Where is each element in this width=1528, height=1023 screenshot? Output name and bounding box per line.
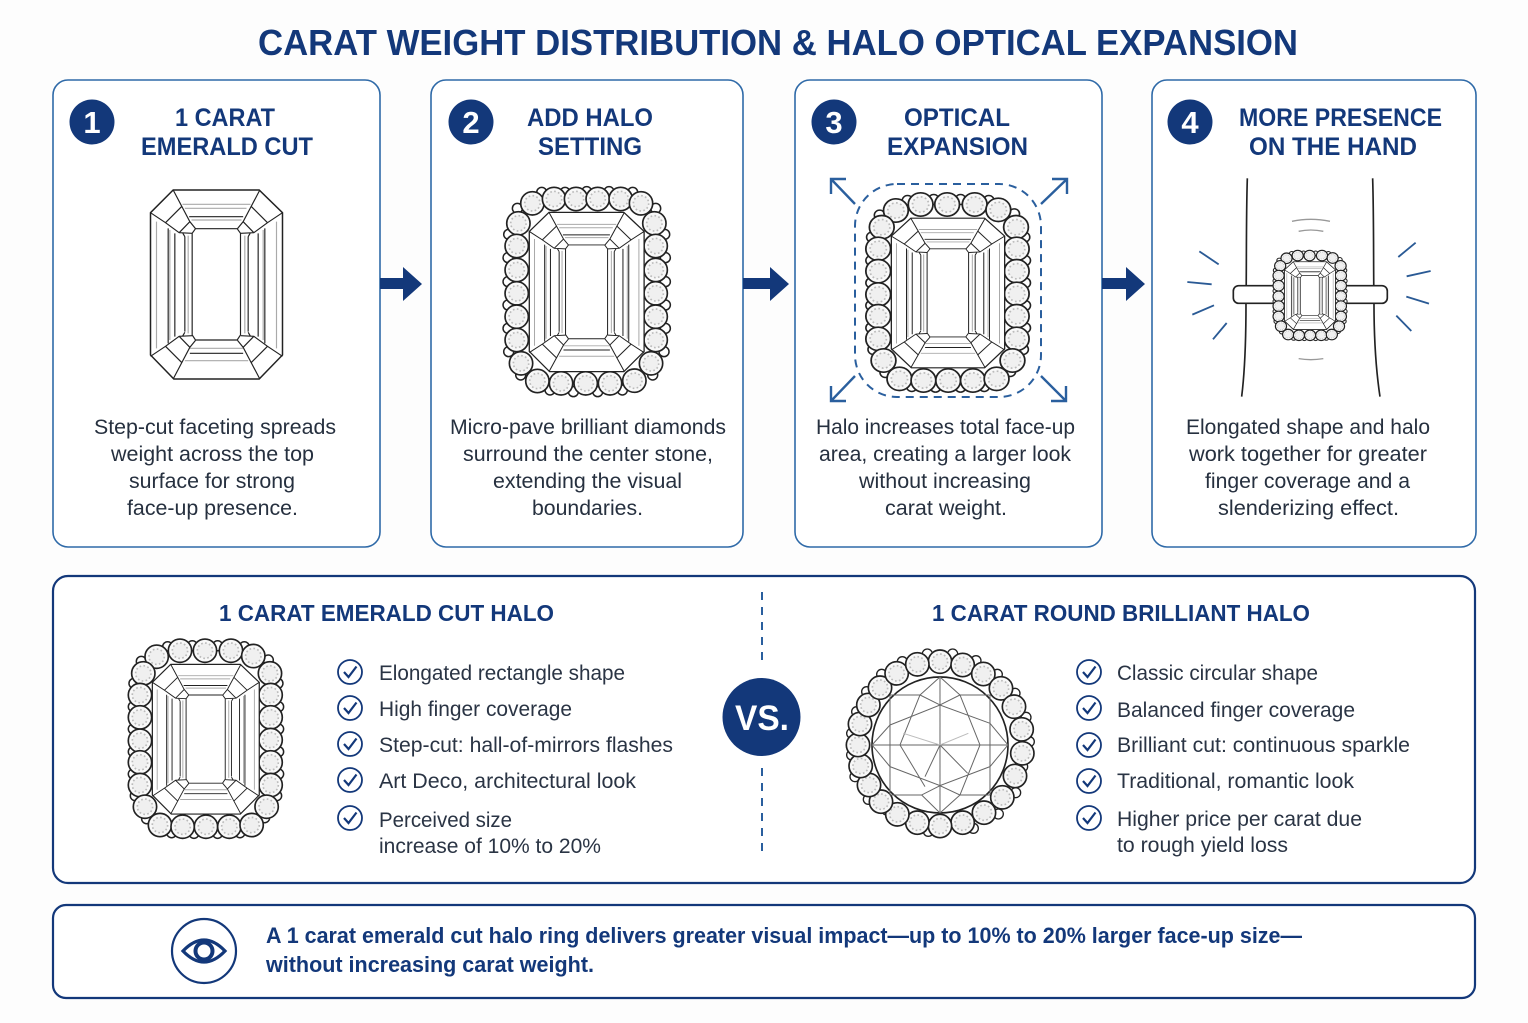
list: round brilliant features: Balanced finger coverage <box>1117 699 1355 722</box>
heading: 1 carat emerald cut: 1 CARAT <box>175 104 275 132</box>
arrow: step 3 to 4 <box>1102 267 1145 301</box>
arrow: step 1 to 2 <box>380 267 422 301</box>
heading: more presence on the hand: ON THE HAND <box>1249 133 1417 161</box>
list: round brilliant features: to rough yield loss <box>1117 834 1288 857</box>
panel: add halo setting <box>431 80 743 547</box>
heading: more presence on the hand: MORE PRESENCE <box>1239 104 1442 132</box>
panel: comparison <box>53 576 1475 883</box>
callout text: without increasing carat weight. <box>265 952 594 977</box>
list: round brilliant features: Higher price per carat due <box>1117 808 1362 831</box>
title: CARAT WEIGHT DISTRIBUTION & HALO OPTICAL EXPANSION <box>258 22 1298 63</box>
description text <box>450 416 726 520</box>
heading: add halo setting: ADD HALO <box>527 104 653 132</box>
list: round brilliant features <box>1077 660 1410 857</box>
arrow: step 2 to 3 <box>743 267 789 301</box>
heading: 1 carat emerald cut: EMERALD CUT <box>141 133 313 161</box>
description text: slenderizing effect. <box>1218 497 1399 520</box>
description text: surround the center stone, <box>463 443 713 466</box>
description text: without increasing <box>858 470 1031 493</box>
description text <box>1186 416 1430 520</box>
icon: eye <box>172 919 236 983</box>
number badge 1: 1 <box>83 105 101 140</box>
description text: extending the visual <box>493 470 682 493</box>
panel: 1 carat emerald cut <box>53 80 380 547</box>
callout text: A 1 carat emerald cut halo ring delivers greater visual impact—up to 10% to 20% larger face-up size— <box>266 923 1302 948</box>
list: round brilliant features: Traditional, romantic look <box>1117 770 1354 793</box>
number badge 4: 4 <box>1181 105 1199 140</box>
list: emerald cut features: Step-cut: hall-of-mirrors flashes <box>379 734 673 757</box>
heading: add halo setting <box>527 104 653 161</box>
number badge 2: 2 <box>462 105 480 140</box>
list: emerald cut features: High finger coverage <box>379 698 572 721</box>
list: emerald cut features: Perceived size <box>379 809 512 832</box>
description text <box>94 416 336 520</box>
description text: Micro-pave brilliant diamonds <box>450 416 726 439</box>
list: emerald cut features <box>338 660 673 858</box>
description text: work together for greater <box>1188 443 1427 466</box>
number badge 3 <box>812 100 856 144</box>
heading: 1 carat emerald cut <box>141 104 313 161</box>
divider with VS badge <box>722 592 800 855</box>
heading: add halo setting: SETTING <box>538 133 642 161</box>
description text: Halo increases total face-up <box>816 416 1075 439</box>
description text: finger coverage and a <box>1205 470 1410 493</box>
icon: round brilliant halo <box>846 649 1034 838</box>
heading: round brilliant halo: 1 CARAT ROUND BRILLIANT HALO <box>932 600 1310 626</box>
expansion arrows <box>831 179 1067 401</box>
number badge 4 <box>1168 100 1212 144</box>
list: round brilliant features: Brilliant cut: continuous sparkle <box>1117 734 1410 757</box>
panel: takeaway callout <box>53 905 1475 998</box>
heading: optical expansion: OPTICAL <box>904 104 1010 132</box>
icon: emerald cut diamond <box>151 190 282 379</box>
description text: face-up presence. <box>127 497 298 520</box>
description text: boundaries. <box>532 497 643 520</box>
number badge 3: 3 <box>825 105 843 140</box>
description text: carat weight. <box>885 497 1007 520</box>
heading: more presence on the hand <box>1239 104 1442 161</box>
description text: weight across the top <box>110 443 314 466</box>
panel: optical expansion <box>795 80 1102 547</box>
list: emerald cut features: Elongated rectangle shape <box>379 662 625 685</box>
heading: optical expansion: EXPANSION <box>887 133 1028 161</box>
number badge 2 <box>448 100 494 144</box>
icon: emerald cut with halo <box>503 187 670 397</box>
heading: optical expansion <box>887 104 1028 161</box>
dashed expansion outline <box>855 184 1041 397</box>
panel: more presence on the hand <box>1152 80 1476 547</box>
number badge 1 <box>70 100 114 144</box>
heading: emerald cut halo: 1 CARAT EMERALD CUT HALO <box>219 600 554 626</box>
description text: Elongated shape and halo <box>1186 416 1430 439</box>
illustration: ring on finger <box>1187 178 1431 397</box>
callout text <box>265 923 1302 977</box>
list: round brilliant features: Classic circular shape <box>1117 662 1318 685</box>
description text <box>816 416 1075 520</box>
description text: area, creating a larger look <box>819 443 1071 466</box>
icon: emerald cut halo <box>128 639 284 838</box>
description text: Step-cut faceting spreads <box>94 416 336 439</box>
description text: surface for strong <box>129 470 295 493</box>
list: emerald cut features: increase of 10% to 20% <box>379 835 601 858</box>
icon: halo stone expanded <box>866 193 1030 392</box>
list: emerald cut features: Art Deco, architectural look <box>379 770 637 793</box>
divider with VS badge: VS. <box>735 699 789 738</box>
